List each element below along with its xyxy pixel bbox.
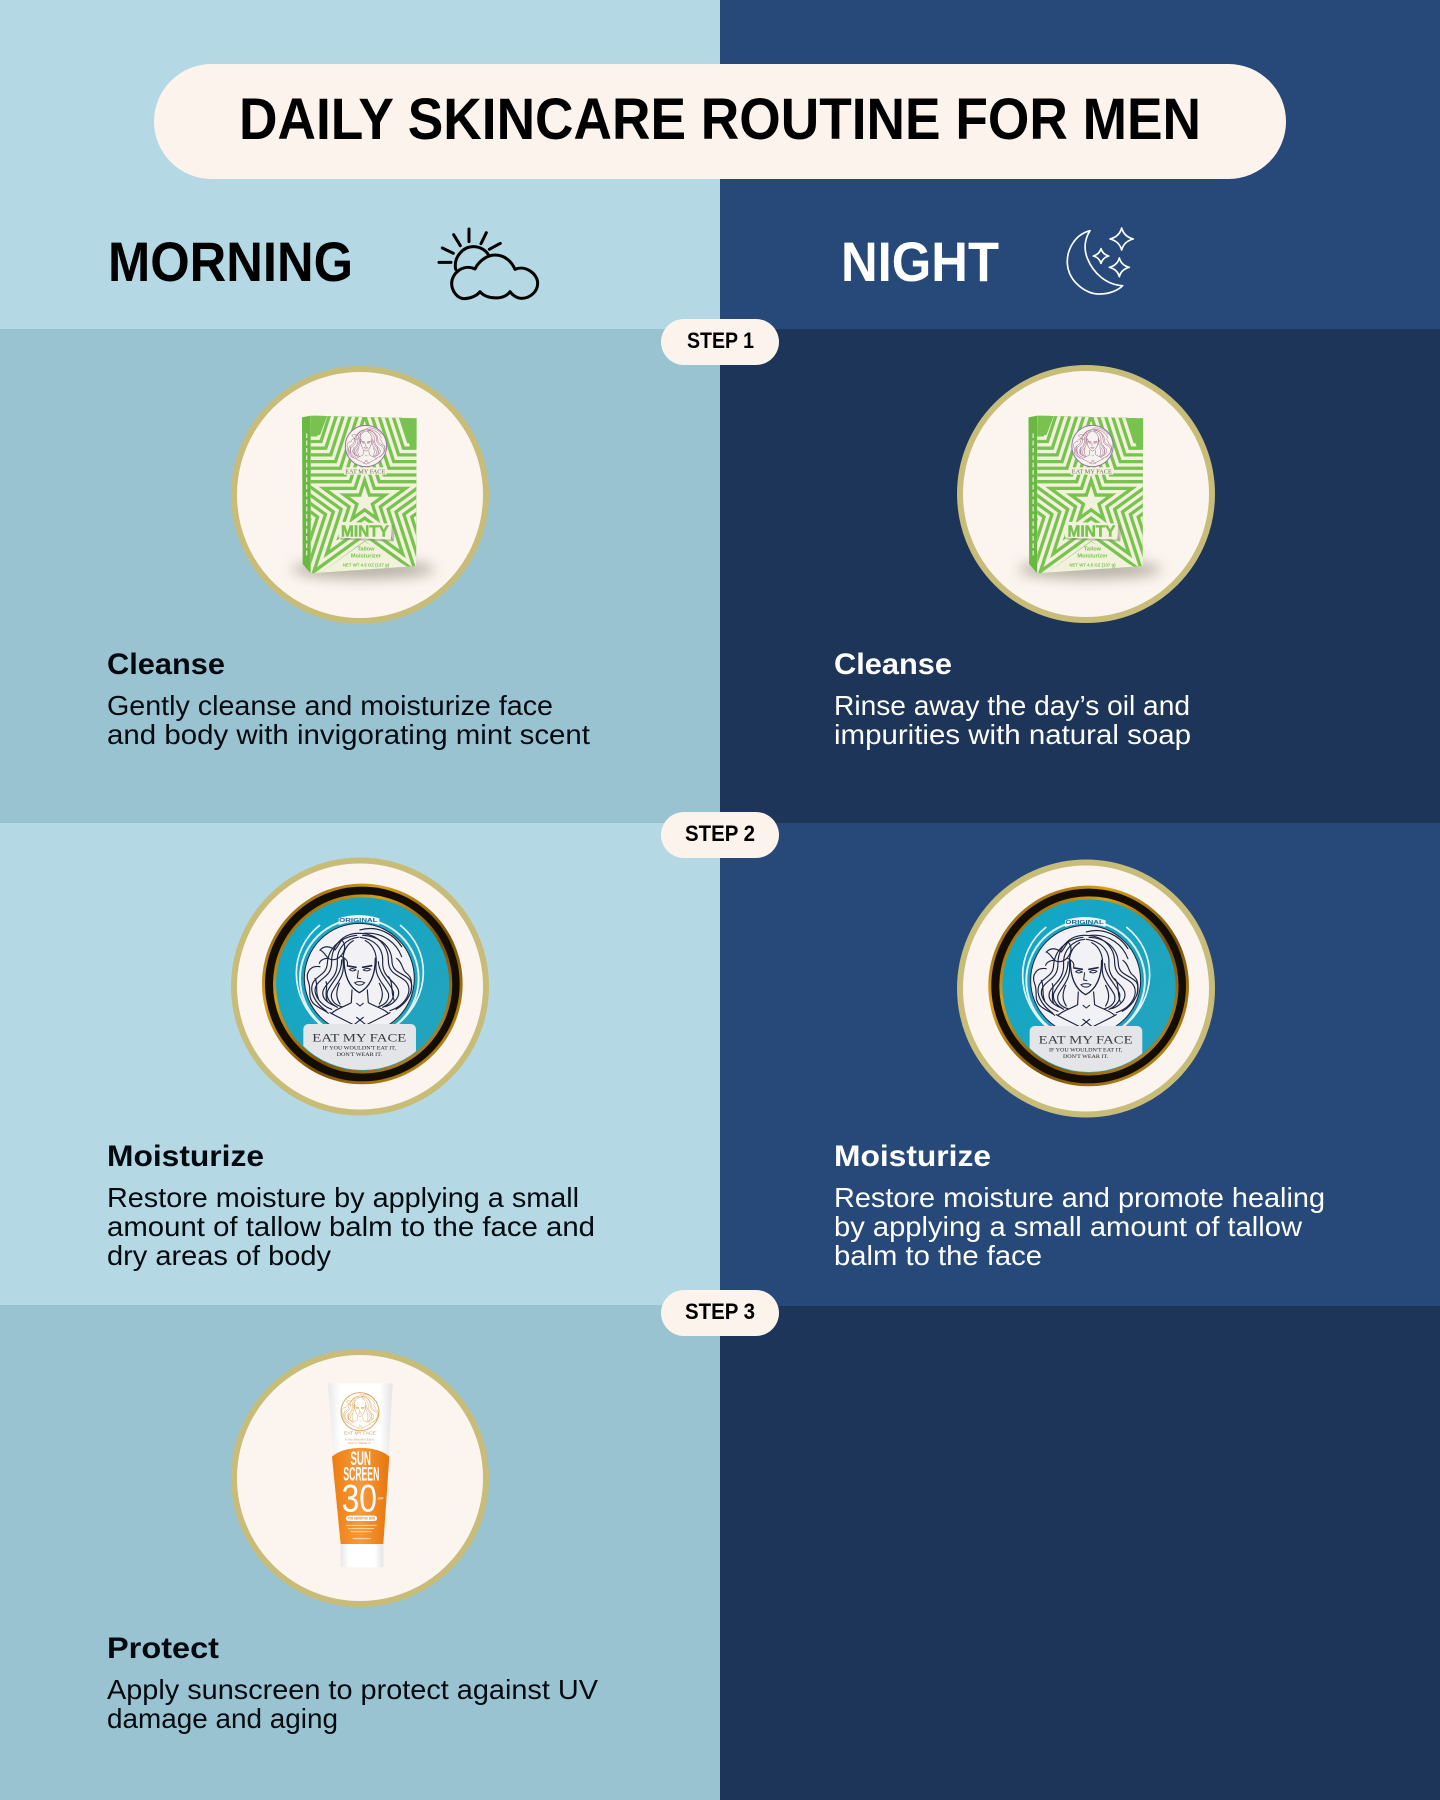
product: night soap box: Tallow: [1084, 546, 1102, 552]
product: sunscreen tube: EAT MY FACE: [344, 1431, 376, 1436]
product: night balm tin: ORIGINAL: [1065, 920, 1105, 926]
product: morning soap box: EAT MY FACE: [345, 469, 386, 475]
panel: night step 1: [720, 329, 1440, 823]
text: morning moisturize: dry areas of body: [107, 1240, 331, 1271]
product: sunscreen tube: Don't Wear It.: [348, 1441, 372, 1445]
badge: step 3: [661, 1290, 779, 1336]
heading: night: NIGHT: [841, 230, 999, 293]
text: morning moisturize: [107, 1140, 595, 1271]
title: DAILY SKINCARE ROUTINE FOR MEN: [239, 87, 1201, 152]
product: sunscreen tube: If You Wouldn't Eat It,: [345, 1437, 375, 1441]
panel: morning step 2: [0, 823, 720, 1305]
product: sunscreen tube: FOR SENSITIVE SKIN: [348, 1517, 375, 1521]
text: morning protect: damage and aging: [107, 1703, 338, 1734]
product: morning soap box: [231, 366, 489, 624]
text: morning protect: [107, 1632, 598, 1734]
badge: step 2: STEP 2: [685, 821, 755, 846]
panel: night step 2: [720, 823, 1440, 1306]
icon: moon and stars: [1067, 228, 1133, 294]
product: morning soap box: MINTY: [341, 523, 389, 540]
text: morning protect: Apply sunscreen to protect against UV: [107, 1674, 598, 1705]
product: morning balm tin: IF YOU WOULDN'T EAT IT,: [323, 1047, 396, 1052]
product: night soap box: NET WT 4.5 OZ (137 g): [1069, 562, 1116, 567]
product: night balm tin: [960, 862, 1212, 1114]
text: night moisturize: Restore moisture and promote healing: [834, 1182, 1325, 1213]
text: morning cleanse: [107, 648, 590, 750]
panel: morning header: [0, 0, 720, 329]
text: night moisturize: [834, 1140, 1325, 1271]
text: night cleanse: impurities with natural soap: [834, 719, 1191, 750]
product: morning balm tin: [234, 860, 486, 1112]
text: night cleanse: Cleanse: [834, 648, 952, 681]
text: night moisturize: Moisturize: [834, 1140, 991, 1173]
badge: step 1: STEP 1: [687, 328, 754, 353]
text: night moisturize: by applying a small amount of tallow: [834, 1211, 1303, 1242]
text: night moisturize: balm to the face: [834, 1240, 1042, 1271]
panel: morning step 3: [0, 1305, 720, 1800]
product: night balm tin: IF YOU WOULDN'T EAT IT,: [1049, 1049, 1122, 1054]
text: morning moisturize: Restore moisture by applying a small: [107, 1182, 579, 1213]
product: morning balm tin: DON'T WEAR IT.: [337, 1053, 382, 1058]
badge: step 3: STEP 3: [685, 1299, 755, 1324]
product: sunscreen tube: SUN: [350, 1449, 371, 1470]
title: [154, 64, 1286, 179]
product: morning soap box: Tallow: [357, 546, 375, 552]
product: morning soap box: NET WT 4.5 OZ (137 g): [343, 562, 390, 567]
product: night soap box: [957, 365, 1215, 623]
product: sunscreen tube: SPF: [378, 1496, 384, 1500]
product: sunscreen tube: 30: [342, 1477, 377, 1521]
heading: morning: MORNING: [108, 230, 353, 293]
badge: step 1: [661, 319, 779, 365]
product: morning balm tin: ORIGINAL: [339, 918, 378, 924]
text: morning protect: Protect: [107, 1632, 219, 1665]
badge: step 2: [661, 812, 779, 858]
panel: night header: [720, 0, 1440, 329]
product: sunscreen tube: [234, 1352, 486, 1604]
text: morning moisturize: amount of tallow balm to the face and: [107, 1211, 595, 1242]
product: night balm tin: DON'T WEAR IT.: [1063, 1055, 1108, 1060]
product: morning soap box: Moisturizer: [351, 553, 382, 559]
product: night balm tin: EAT MY FACE: [1039, 1033, 1133, 1046]
text: morning cleanse: and body with invigorating mint scent: [107, 719, 590, 750]
panel: night step 3 empty: [720, 1306, 1440, 1800]
text: night cleanse: [834, 648, 1191, 750]
text: morning moisturize: Moisturize: [107, 1140, 264, 1173]
product: night soap box: Moisturizer: [1077, 553, 1108, 559]
product: night soap box: EAT MY FACE: [1072, 469, 1112, 475]
text: morning cleanse: Cleanse: [107, 648, 225, 681]
icon: sun and cloud: [439, 229, 538, 299]
text: morning cleanse: Gently cleanse and moisturize face: [107, 690, 553, 721]
panel: morning step 1: [0, 329, 720, 823]
product: night soap box: MINTY: [1067, 523, 1115, 540]
product: morning balm tin: EAT MY FACE: [312, 1031, 406, 1044]
product: sunscreen tube: SCREEN: [343, 1464, 379, 1485]
text: night cleanse: Rinse away the day’s oil and: [834, 690, 1190, 721]
